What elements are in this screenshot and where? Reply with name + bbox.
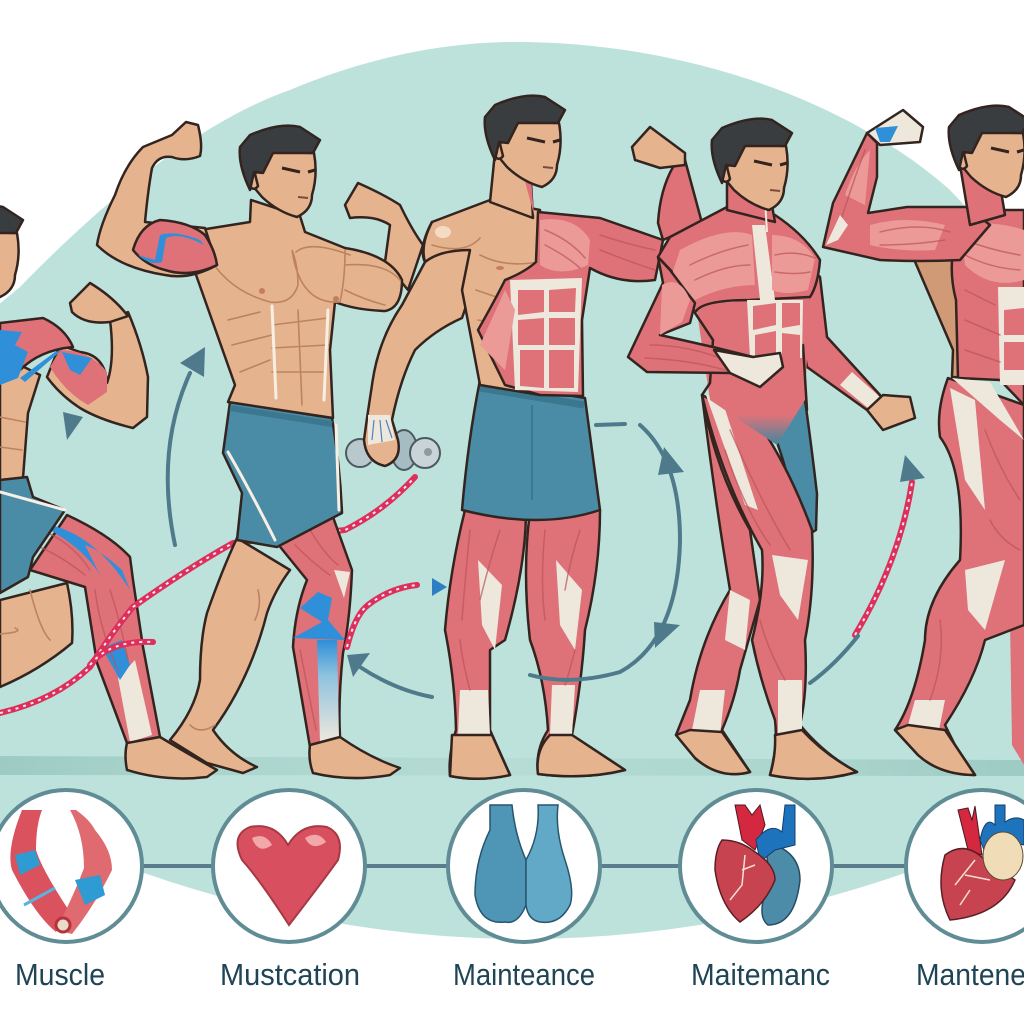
neck xyxy=(490,142,533,218)
icon: heart muscle xyxy=(213,790,365,942)
leg xyxy=(30,515,160,743)
ground band xyxy=(0,756,1024,776)
right arm back xyxy=(345,183,423,290)
neck xyxy=(960,165,1005,225)
raised arm xyxy=(97,122,217,276)
torso skin xyxy=(424,200,540,395)
torso xyxy=(696,295,810,445)
shoulder xyxy=(0,318,73,376)
head: figure 4 xyxy=(712,119,792,210)
figure 3: half muscle figure with dumbbell xyxy=(346,96,702,779)
torso xyxy=(195,200,402,418)
left arm xyxy=(628,257,753,373)
right leg xyxy=(526,510,625,776)
left leg xyxy=(445,510,526,779)
shorts xyxy=(462,380,600,520)
figure 5: right muscle figure xyxy=(823,106,1024,775)
pink rope connectors xyxy=(347,482,912,647)
torso muscle xyxy=(478,212,663,396)
connector line between icons xyxy=(140,864,905,868)
left leg xyxy=(676,395,760,774)
right arm xyxy=(803,270,880,410)
upper raised arm xyxy=(658,160,702,240)
icon: anatomical heart with aorta xyxy=(906,790,1024,942)
dumbbell xyxy=(346,430,440,470)
front leg xyxy=(277,517,352,747)
leg xyxy=(895,378,1024,775)
shorts xyxy=(223,402,342,547)
process arrows xyxy=(63,347,925,697)
shorts xyxy=(0,477,65,593)
figure 1: partial left figure xyxy=(0,206,217,778)
neck xyxy=(727,175,775,222)
head: figure 1 xyxy=(0,206,23,297)
arm left xyxy=(364,222,480,466)
back leg xyxy=(170,538,290,773)
figure 4: full muscle figure xyxy=(628,119,915,779)
head: figure 2 xyxy=(240,126,320,217)
icon: blue muscle xyxy=(448,790,600,942)
labels: Muscle xyxy=(15,957,105,992)
far leg xyxy=(1010,610,1024,765)
figure 2: skin figure flexing xyxy=(97,122,423,778)
labels xyxy=(15,957,1024,992)
torso xyxy=(0,355,40,480)
icon: muscle bundle xyxy=(0,790,142,942)
arm xyxy=(47,312,148,428)
rope behind figure 2 xyxy=(0,477,415,713)
head: figure 5 xyxy=(949,106,1024,197)
labels: Mustcation xyxy=(220,957,360,992)
right leg xyxy=(702,395,857,779)
arm xyxy=(823,133,990,261)
labels: Maitemanc xyxy=(691,957,830,992)
icon: anatomical heart xyxy=(680,790,832,942)
labels: Mainteance xyxy=(453,957,595,992)
blue shorts xyxy=(770,400,817,540)
head: figure 3 xyxy=(485,96,565,187)
torso xyxy=(913,225,980,378)
